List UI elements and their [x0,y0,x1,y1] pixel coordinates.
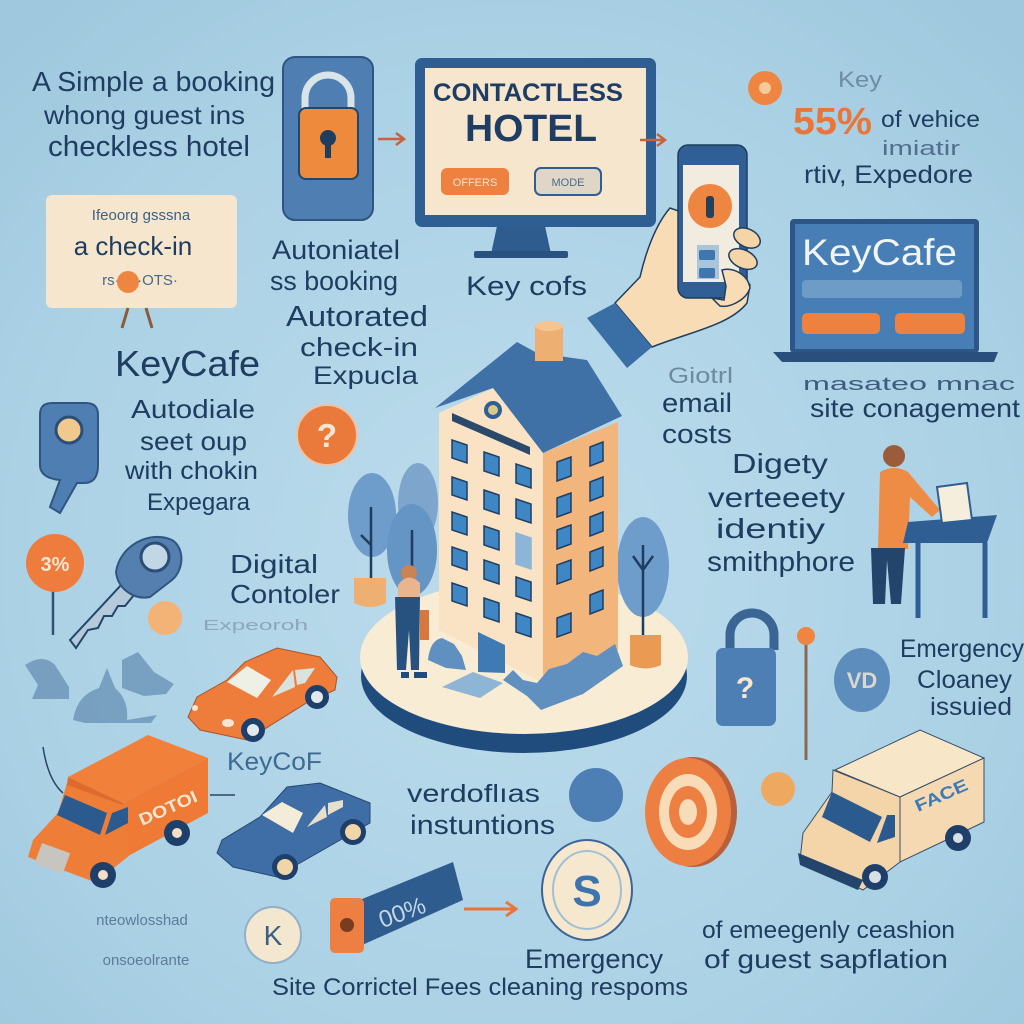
text: digital identity [707,448,855,577]
monitor: contactless hotel: CONTACTLESS [433,79,623,107]
arrow [464,902,516,916]
stat: 55%: of vehice [881,106,980,132]
stat: 55%: Key [838,67,882,92]
shrubs [428,638,623,710]
stat: 55%: imiatir [882,138,960,160]
icon: key tag [40,403,98,513]
icon: tag 00%: 00% [375,892,430,934]
icon: emblem coin S: S [572,867,602,916]
windows [452,440,603,637]
intro text: whong guest ins [43,100,245,130]
icon: small emblem: K [264,920,283,951]
text: verifications: instuntions [410,810,555,840]
text: verifications: verdoflıas [407,780,540,808]
text: automated booking: ss booking [270,266,398,296]
blurred note [96,912,189,969]
check-in card: a check-in [74,231,192,261]
text: digital identity: Digety [732,448,828,479]
illustration: orange van: DOTOI [136,787,200,830]
small blurred marks: Expeoroh [203,617,308,634]
text: site management [803,374,1021,423]
check-in card: rs·n· ·OTS· [102,272,178,289]
illustration: orange van [28,735,235,888]
text: verifications [407,780,555,840]
monitor: contactless hotel: OFFERS [453,177,497,189]
text: key cofs: Key cofs [466,271,587,301]
icon: question badge: ? [317,417,337,454]
intro text [32,66,275,163]
text: automated booking [270,235,428,390]
illustration: orange car [188,648,337,742]
text: site management: site conagement [810,393,1021,423]
text: site control fees: Site Corrictel Fees cleaning respoms [272,974,688,1001]
sign [452,401,530,455]
monitor: contactless hotel: MODE [552,177,584,189]
text: digital identity: smithphore [707,546,855,577]
door and mat [478,632,505,673]
text: keycof: KeyCoF [227,748,322,776]
roof [435,342,622,453]
icon: question badge [297,405,357,465]
illustration: cream truck [798,730,984,890]
text: email costs [662,363,733,449]
text: guest satisfaction: of guest sapflation [704,944,948,974]
check-in card: Ifeoorg gsssna [92,207,191,224]
text: left list: Expegara [147,489,251,516]
text: automated booking: check-in [300,332,418,362]
text: digital controller: Contoler [230,579,340,609]
text: guest satisfaction [702,917,955,974]
icon: VD badge: VD [847,668,877,693]
stat: 55% [748,67,980,189]
text: left list: with chokin [124,457,258,485]
icon: phone with padlock [283,57,373,220]
heading: keycafe left: KeyCafe [115,343,260,384]
icon: small coin [761,772,795,806]
text: emergency cleaning: Cloaney [917,666,1013,694]
icon: pin [797,627,815,760]
tower [439,388,543,683]
intro text: checkless hotel [48,131,250,163]
text: email costs: email [662,388,732,418]
text: digital identity: verteeety [708,482,845,513]
text: email costs: Giotrl [668,363,733,388]
monitor: contactless hotel: HOTEL [465,108,597,150]
illustration: blue car [217,783,370,880]
text: guest satisfaction: of emeegenly ceashion [702,917,955,944]
laptop: KeyCafe [773,219,998,362]
text: site management: masateo mnac [803,374,1015,394]
trees [348,463,669,668]
icon: tag 00% [330,862,463,953]
icon: pin with percent: 3% [41,554,70,576]
figure [395,565,429,678]
blurred note: onsoeolrante [103,952,189,969]
icon: small emblem [245,907,301,963]
arrow [378,133,404,145]
icon: padlock question: ? [736,672,754,705]
text: digital identity: identiy [716,513,825,544]
text: automated booking: Autorated [286,301,428,333]
text: automated booking: Autoniatel [272,235,400,265]
text: automated booking: Expucla [313,362,418,390]
icon: hand holding phone [587,145,763,368]
text: emergency: Emergency [525,944,663,974]
text: left list: Autodiale [131,394,255,424]
blurred note: nteowlosshad [96,912,188,929]
arrow [640,134,665,146]
icon: emblem coin S [542,840,632,940]
stat: 55%: rtiv, Expedore [804,161,973,189]
illustration: person at desk [871,445,997,618]
monitor: contactless hotel [415,58,656,258]
text: emergency cleaning [900,635,1024,721]
icon: big orange coin [645,757,737,867]
stat: 55%: 55% [793,101,872,143]
platform [360,580,688,753]
text: digital controller: Digital [230,549,318,579]
text: left list: seet oup [140,426,247,456]
intro text: A Simple a booking [32,66,275,97]
chimney [535,321,563,361]
icon: padlock question [716,613,776,726]
icon: big key [70,537,181,648]
check-in card [46,195,237,328]
icon: small blue circle [569,768,623,822]
text: digital controller [230,549,340,609]
icon: VD badge [834,648,890,712]
text: emergency cleaning: issuied [930,693,1012,721]
central hotel building [348,321,688,753]
icon: pin with percent [26,534,84,635]
text: email costs: costs [662,419,732,449]
text: emergency cleaning: Emergency [900,635,1024,663]
illustration: cream truck: FACE [912,776,971,816]
small blurred marks [25,601,308,723]
text: left list [124,394,258,516]
laptop: KeyCafe: KeyCafe [802,232,957,273]
